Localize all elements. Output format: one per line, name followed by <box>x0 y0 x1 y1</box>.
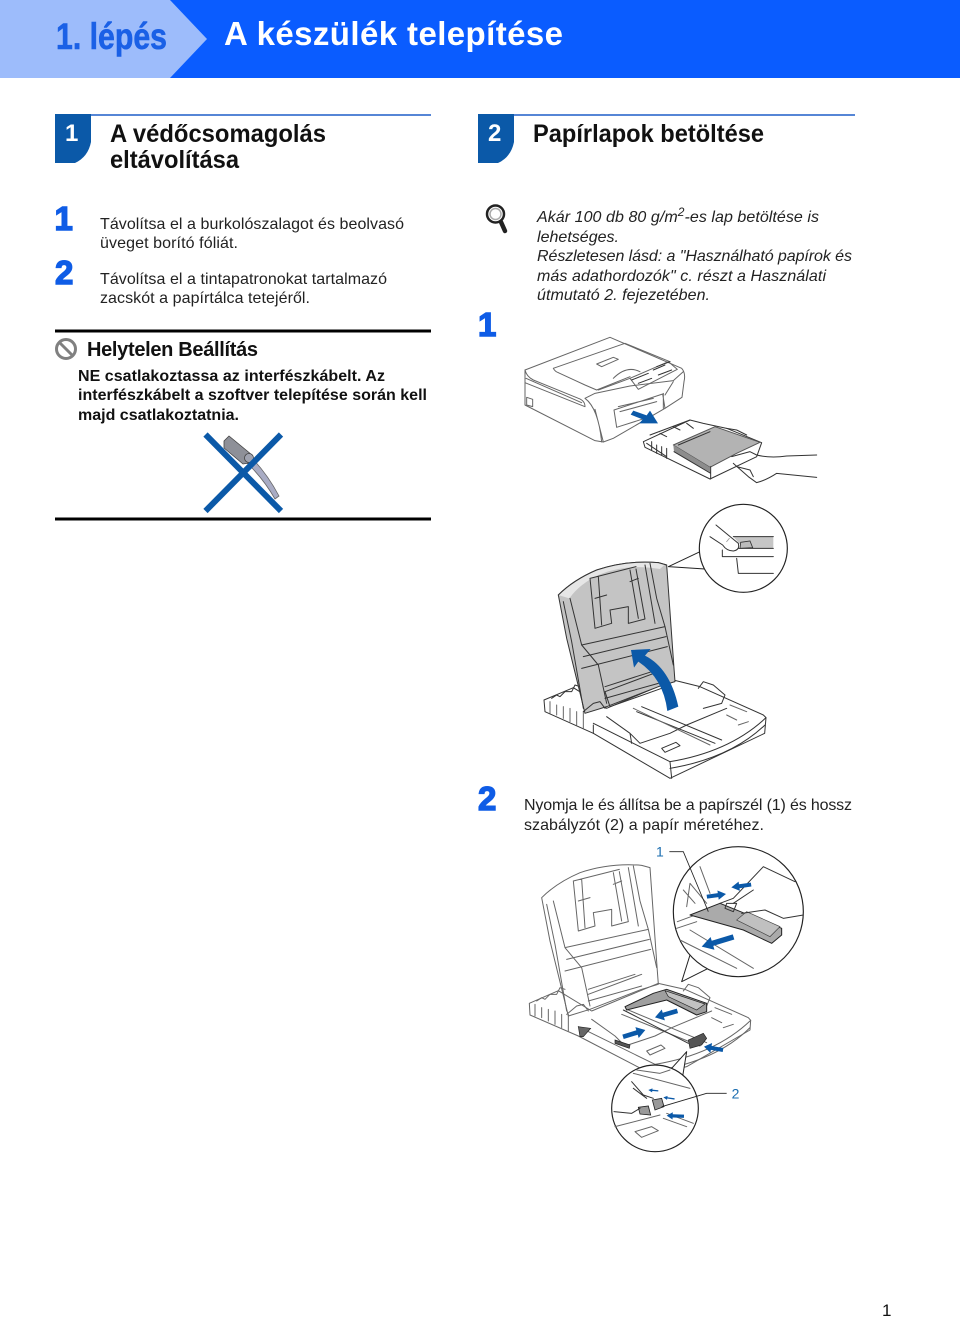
illustration: printer with tray pulled out <box>525 337 817 483</box>
magnified circle: paper guide <box>673 847 803 982</box>
callout label 2 <box>662 1085 740 1107</box>
step 1: remove tape: Távolítsa el a burkolószalagot és beolvasó <box>100 216 404 233</box>
section 2 heading: Papírlapok betöltése <box>533 120 764 148</box>
step 2: remove ink bag <box>55 254 387 307</box>
raised cover <box>558 562 675 713</box>
warning text: interfészkábelt a szoftver telepítése során kell <box>78 387 427 404</box>
note text: 2 <box>677 205 685 219</box>
header banner <box>0 0 960 78</box>
section 2 heading: 2 <box>488 120 501 147</box>
main title: A készülék telepítése <box>224 15 563 52</box>
step 2: remove ink bag: zacskót a papírtálca tetejéről. <box>100 290 310 307</box>
section 2 heading <box>478 114 855 163</box>
section 1 heading: eltávolítása <box>110 146 240 174</box>
note text: lehetséges. <box>537 229 619 246</box>
step 1: remove tape: 1 <box>54 200 73 237</box>
note text <box>536 205 852 304</box>
step 1: remove tape: üveget borító fóliát. <box>100 235 238 252</box>
note text: -es lap betöltése is <box>684 209 819 226</box>
warning box <box>55 330 431 520</box>
step 2 text: szabályzót (2) a papír méretéhez. <box>524 817 764 834</box>
hand <box>732 452 817 483</box>
note text: Akár 100 db 80 g/m <box>537 209 678 226</box>
callout label 1: 1 <box>656 843 664 859</box>
paper guide <box>623 989 707 1048</box>
icon: prohibited <box>56 340 76 358</box>
step 2: remove ink bag: 2 <box>55 254 73 291</box>
step number 1 (paper): 1 <box>478 306 496 343</box>
step 2: remove ink bag: Távolítsa el a tintapatronokat tartalmazó <box>100 271 387 288</box>
note text: más adathordozók" c. részt a Használati <box>537 268 826 285</box>
step number 2 (paper): 2 <box>478 780 496 817</box>
step 2 text <box>524 797 852 834</box>
warning text: majd csatlakoztatnia. <box>78 407 239 424</box>
warning text <box>78 368 427 424</box>
section 1 heading <box>55 114 431 174</box>
arrow <box>631 411 658 423</box>
note text: Részletesen lásd: a "Használható papírok és <box>537 248 852 265</box>
section 1 heading: 1 <box>65 120 78 147</box>
tray base <box>544 680 766 778</box>
warning text: NE csatlakoztassa az interfészkábelt. Az <box>78 368 385 385</box>
icon: magnifier <box>487 206 505 231</box>
note text: útmutató 2. fejezetében. <box>537 287 710 304</box>
callout label 1 <box>656 843 708 912</box>
icon: crossed-out interface cable <box>206 434 281 511</box>
paper tray <box>643 420 762 479</box>
step 2 text: Nyomja le és állítsa be a papírszél (1) és hossz <box>524 797 852 814</box>
step label: 1. lépés <box>56 16 167 57</box>
raised cover <box>542 865 658 1016</box>
step 1: remove tape <box>54 200 404 252</box>
section 1 heading: A védőcsomagolás <box>110 120 326 148</box>
printer <box>525 337 685 442</box>
magnified circle: length guide <box>612 1052 698 1152</box>
blue arrows on tray <box>621 1005 724 1055</box>
illustration: lifting paper cover <box>544 504 787 778</box>
callout label 2: 2 <box>732 1085 740 1101</box>
tray base <box>529 983 751 1075</box>
illustration: adjusting paper guides <box>529 843 803 1152</box>
warning heading: Helytelen Beállítás <box>87 339 258 361</box>
curved arrow <box>631 649 678 711</box>
magnified detail <box>668 504 787 592</box>
